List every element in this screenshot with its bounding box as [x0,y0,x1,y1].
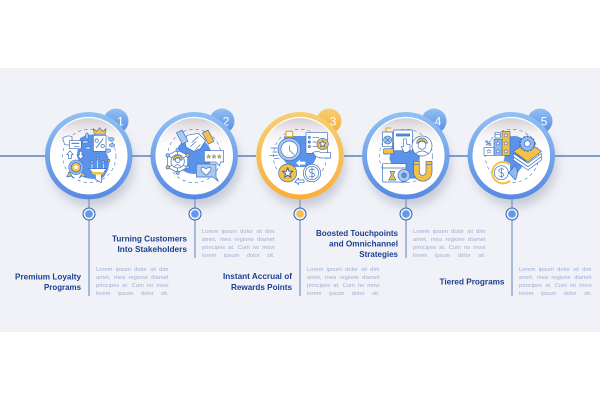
text block 4: Lorem ipsum dolor sit dim [413,229,486,235]
step 1 [45,108,134,296]
text block 5: Lorem ipsum dolor sit dim [519,267,592,273]
heading: Instant Accrual of Rewards Points [223,271,292,292]
text block 3: amet, mea regione diamet [307,275,380,281]
text block 4: lorem ipsum dolor sit. [413,253,486,259]
heading: Boosted Touchpoints and Omnichannel Strategies: and Omnichannel [329,239,398,249]
text block 1 [96,267,168,297]
connector and marker 2 [189,199,201,258]
text block 1: lorem ipsum dolor sit. [96,291,168,297]
number badge 1: 1 [117,114,124,128]
circle frame 4 [362,112,451,207]
icon: premium loyalty [63,128,116,183]
number badge 4 [422,108,446,134]
connector and marker 3 [294,199,306,296]
text block 1: principes at. Cum no movi [96,283,168,289]
icon: touchpoints and magnet [379,128,433,183]
background panel [0,68,600,332]
text block 2: Lorem ipsum dolor sit dim [202,229,274,235]
text block 4 [413,229,486,259]
step 3 [256,108,345,296]
text block 2: principes at. Cum no movi [202,245,274,251]
text block 1: Lorem ipsum dolor sit dim [96,267,168,273]
step 4 [362,108,451,258]
text block 2: lorem ipsum dolor sit. [202,253,274,259]
number badge 2 [210,108,234,134]
step 5 [468,108,557,296]
circle frame 3 [256,112,345,207]
text block 5: principes at. Cum no movi [519,283,592,289]
text block 2 [202,229,274,259]
heading: Turning Customers Into Stakeholders: Into Stakeholders [118,244,187,254]
number badge 2: 2 [223,114,230,128]
heading: Boosted Touchpoints and Omnichannel Strategies: Boosted Touchpoints [316,228,398,238]
circle frame 2 [150,112,240,207]
text block 1: amet, mea regione diamet [96,275,168,281]
number badge 5: 5 [541,114,548,128]
connector and marker 4 [400,199,412,258]
heading: Premium Loyalty Programs: Premium Loyalty [15,272,81,282]
circle frame 1 [45,112,134,207]
number badge 1 [104,108,128,134]
icon: stopwatch and reward coins [269,129,331,185]
heading: Turning Customers Into Stakeholders [112,234,187,254]
text block 3: principes at. Cum no movi [307,283,380,289]
heading: Instant Accrual of Rewards Points: Rewards Points [231,282,292,292]
text block 3: lorem ipsum dolor sit. [307,291,380,297]
heading: Tiered Programs: Tiered Programs [440,277,505,287]
connector and marker 5 [506,199,518,296]
icon: handshake and stakeholders [166,129,224,183]
text block 5 [519,267,592,297]
number badge 5 [528,108,552,134]
number badge 3 [316,108,342,134]
heading: Premium Loyalty Programs: Programs [44,282,81,292]
number badge 4: 4 [435,114,442,128]
heading: Boosted Touchpoints and Omnichannel Strategies [316,228,398,259]
number badge 3: 3 [330,114,337,128]
icon: tiers and gear [484,129,541,183]
text block 4: amet, mea regione diamet [413,237,486,243]
circle frame 5 [468,112,557,207]
text block 5: amet, mea regione diamet [519,275,592,281]
text block 4: principes at. Cum no movi [413,245,486,251]
heading: Turning Customers Into Stakeholders: Turning Customers [112,234,187,244]
heading: Boosted Touchpoints and Omnichannel Strategies: Strategies [359,249,398,259]
connector and marker 1 [83,199,95,296]
text block 2: amet, mea regione diamet [202,237,274,243]
heading: Instant Accrual of Rewards Points: Instant Accrual of [223,271,292,281]
text block 3 [307,267,380,297]
text block 3: Lorem ipsum dolor sit dim [307,267,380,273]
horizontal timeline segments [0,155,600,157]
text block 5: lorem ipsum dolor sit. [519,291,592,297]
heading: Premium Loyalty Programs [15,272,81,292]
step 2 [150,108,240,258]
